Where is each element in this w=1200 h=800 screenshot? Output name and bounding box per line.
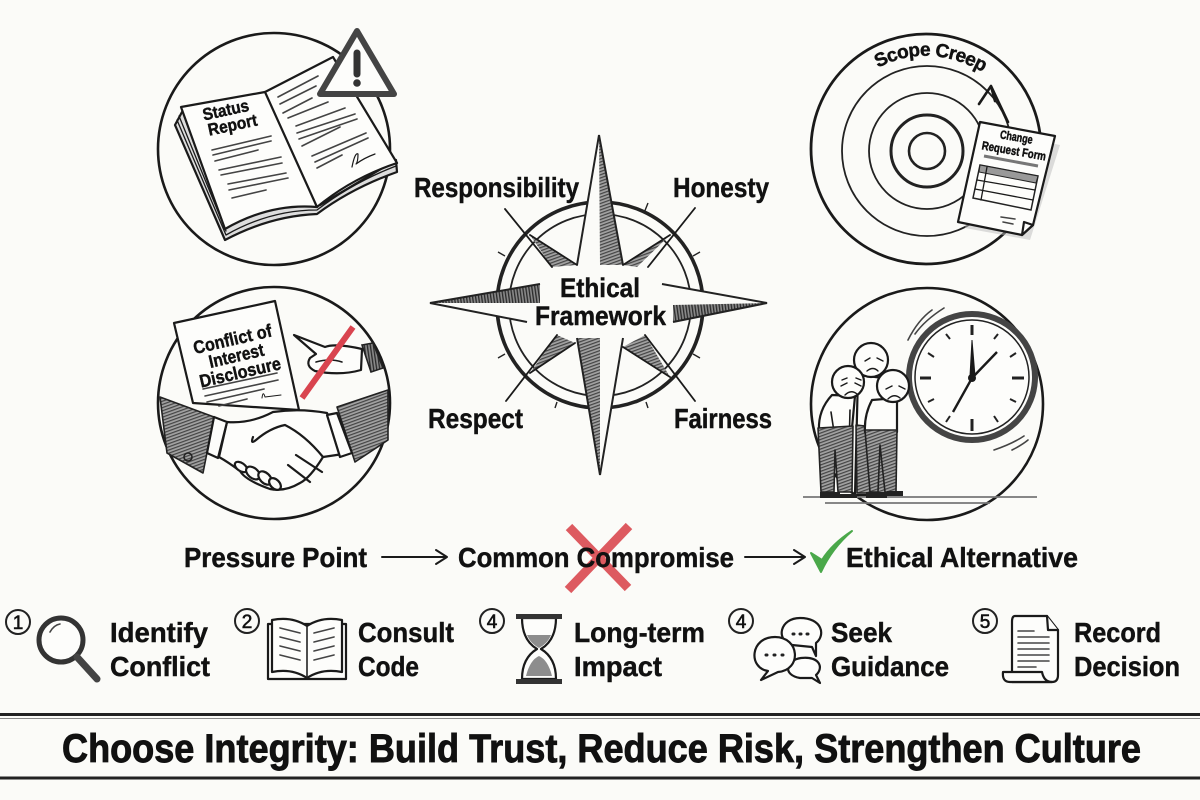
text: honesty: Honesty bbox=[673, 172, 769, 203]
text: conflict of interest disclosure: Interest bbox=[207, 340, 266, 372]
flow: pressure to ethical alternative bbox=[184, 526, 1078, 590]
step 2: consult code bbox=[235, 609, 454, 682]
icon: change request form bbox=[958, 122, 1060, 240]
number badge: 4 bbox=[736, 612, 747, 633]
text: label bbox=[831, 617, 949, 682]
number badge: 2 bbox=[242, 612, 252, 633]
text: label: Impact bbox=[574, 651, 662, 682]
text: label: Decision bbox=[1074, 651, 1180, 682]
text: status report: Status bbox=[201, 96, 251, 124]
text: label bbox=[358, 617, 454, 682]
step 4: seek guidance bbox=[729, 609, 949, 683]
icon: warning triangle bbox=[320, 31, 394, 94]
text: conflict of interest disclosure: Disclosure bbox=[197, 353, 283, 391]
compass: ethical framework bbox=[414, 135, 772, 475]
icon: speech bubbles bbox=[754, 618, 821, 683]
icon: document scroll bbox=[1003, 616, 1058, 682]
number badge bbox=[6, 610, 30, 634]
text: fairness: Fairness bbox=[674, 403, 772, 434]
icon: open book bbox=[268, 619, 346, 679]
icon: red x bbox=[568, 526, 629, 590]
panel: scope creep target bbox=[810, 32, 1060, 266]
text: label bbox=[574, 617, 705, 682]
text: label bbox=[110, 617, 210, 682]
icon: hourglass bbox=[516, 614, 562, 684]
text: conflict of interest disclosure: Conflict of bbox=[191, 320, 275, 358]
text: common compromise: Common Compromise bbox=[458, 542, 734, 573]
text: form title: Request Form bbox=[981, 138, 1047, 163]
icon: ground line bbox=[803, 497, 1037, 503]
text: label: Guidance bbox=[831, 651, 949, 682]
panel: burnout clock bbox=[803, 288, 1043, 520]
text: ethical framework: Framework bbox=[535, 301, 667, 331]
number badge bbox=[729, 609, 753, 633]
step 5: record decision bbox=[973, 609, 1180, 682]
number badge bbox=[235, 609, 259, 633]
icon: compass star points bbox=[430, 135, 767, 475]
banner: closing message bbox=[0, 714, 1200, 778]
icon: compass rings bbox=[497, 202, 703, 408]
text: conflict of interest disclosure bbox=[190, 320, 283, 391]
arrow bbox=[745, 550, 805, 564]
text: ethical framework bbox=[535, 273, 667, 331]
number badge: 5 bbox=[980, 612, 990, 633]
step 1: identify conflict bbox=[6, 610, 210, 682]
text: pressure point: Pressure Point bbox=[184, 542, 367, 573]
panel: status report book bbox=[158, 31, 397, 265]
text: respect: Respect bbox=[428, 403, 523, 434]
text: label: Record bbox=[1074, 617, 1161, 648]
text: ethical alternative: Ethical Alternative bbox=[846, 542, 1078, 573]
icon: pointing hand bbox=[294, 335, 383, 373]
number badge bbox=[973, 609, 997, 633]
text: form title bbox=[981, 125, 1050, 163]
text: status report bbox=[201, 95, 259, 140]
person: left bbox=[818, 366, 864, 498]
text: label: Identify bbox=[110, 617, 208, 648]
number badge: 1 bbox=[13, 613, 23, 634]
text: scope creep: Scope Creep bbox=[874, 44, 986, 72]
person: right bbox=[865, 370, 909, 498]
text: label: Consult bbox=[358, 617, 454, 648]
arrow bbox=[382, 550, 447, 564]
panel: conflict of interest handshake bbox=[158, 287, 390, 519]
text: ethical framework: Ethical bbox=[560, 273, 640, 303]
person: back bbox=[854, 343, 888, 495]
text: label: Long-term bbox=[574, 617, 705, 648]
icon: red strike bbox=[302, 327, 353, 398]
text: form title: Change bbox=[999, 127, 1034, 147]
text: label: Code bbox=[358, 651, 419, 682]
step 3: long-term impact bbox=[480, 609, 705, 684]
icon: open book pages bbox=[175, 57, 397, 240]
icon: tired people bbox=[818, 343, 909, 498]
icon: creep arrow bbox=[979, 86, 1008, 122]
number badge bbox=[480, 609, 504, 633]
icon: magnifier bbox=[39, 618, 97, 679]
text: status report: Report bbox=[206, 111, 259, 140]
icon: target rings bbox=[842, 66, 1012, 236]
text: label: Conflict bbox=[110, 651, 210, 682]
icon: disclosure form bbox=[174, 301, 299, 410]
icon: handshake bbox=[160, 390, 388, 492]
icon: clock bbox=[908, 308, 1035, 450]
text: label bbox=[1074, 617, 1180, 682]
text: responsibility: Responsibility bbox=[414, 172, 579, 203]
icon: green check bbox=[811, 531, 852, 572]
text: label: Seek bbox=[831, 617, 892, 648]
number badge: 4 bbox=[487, 612, 498, 633]
